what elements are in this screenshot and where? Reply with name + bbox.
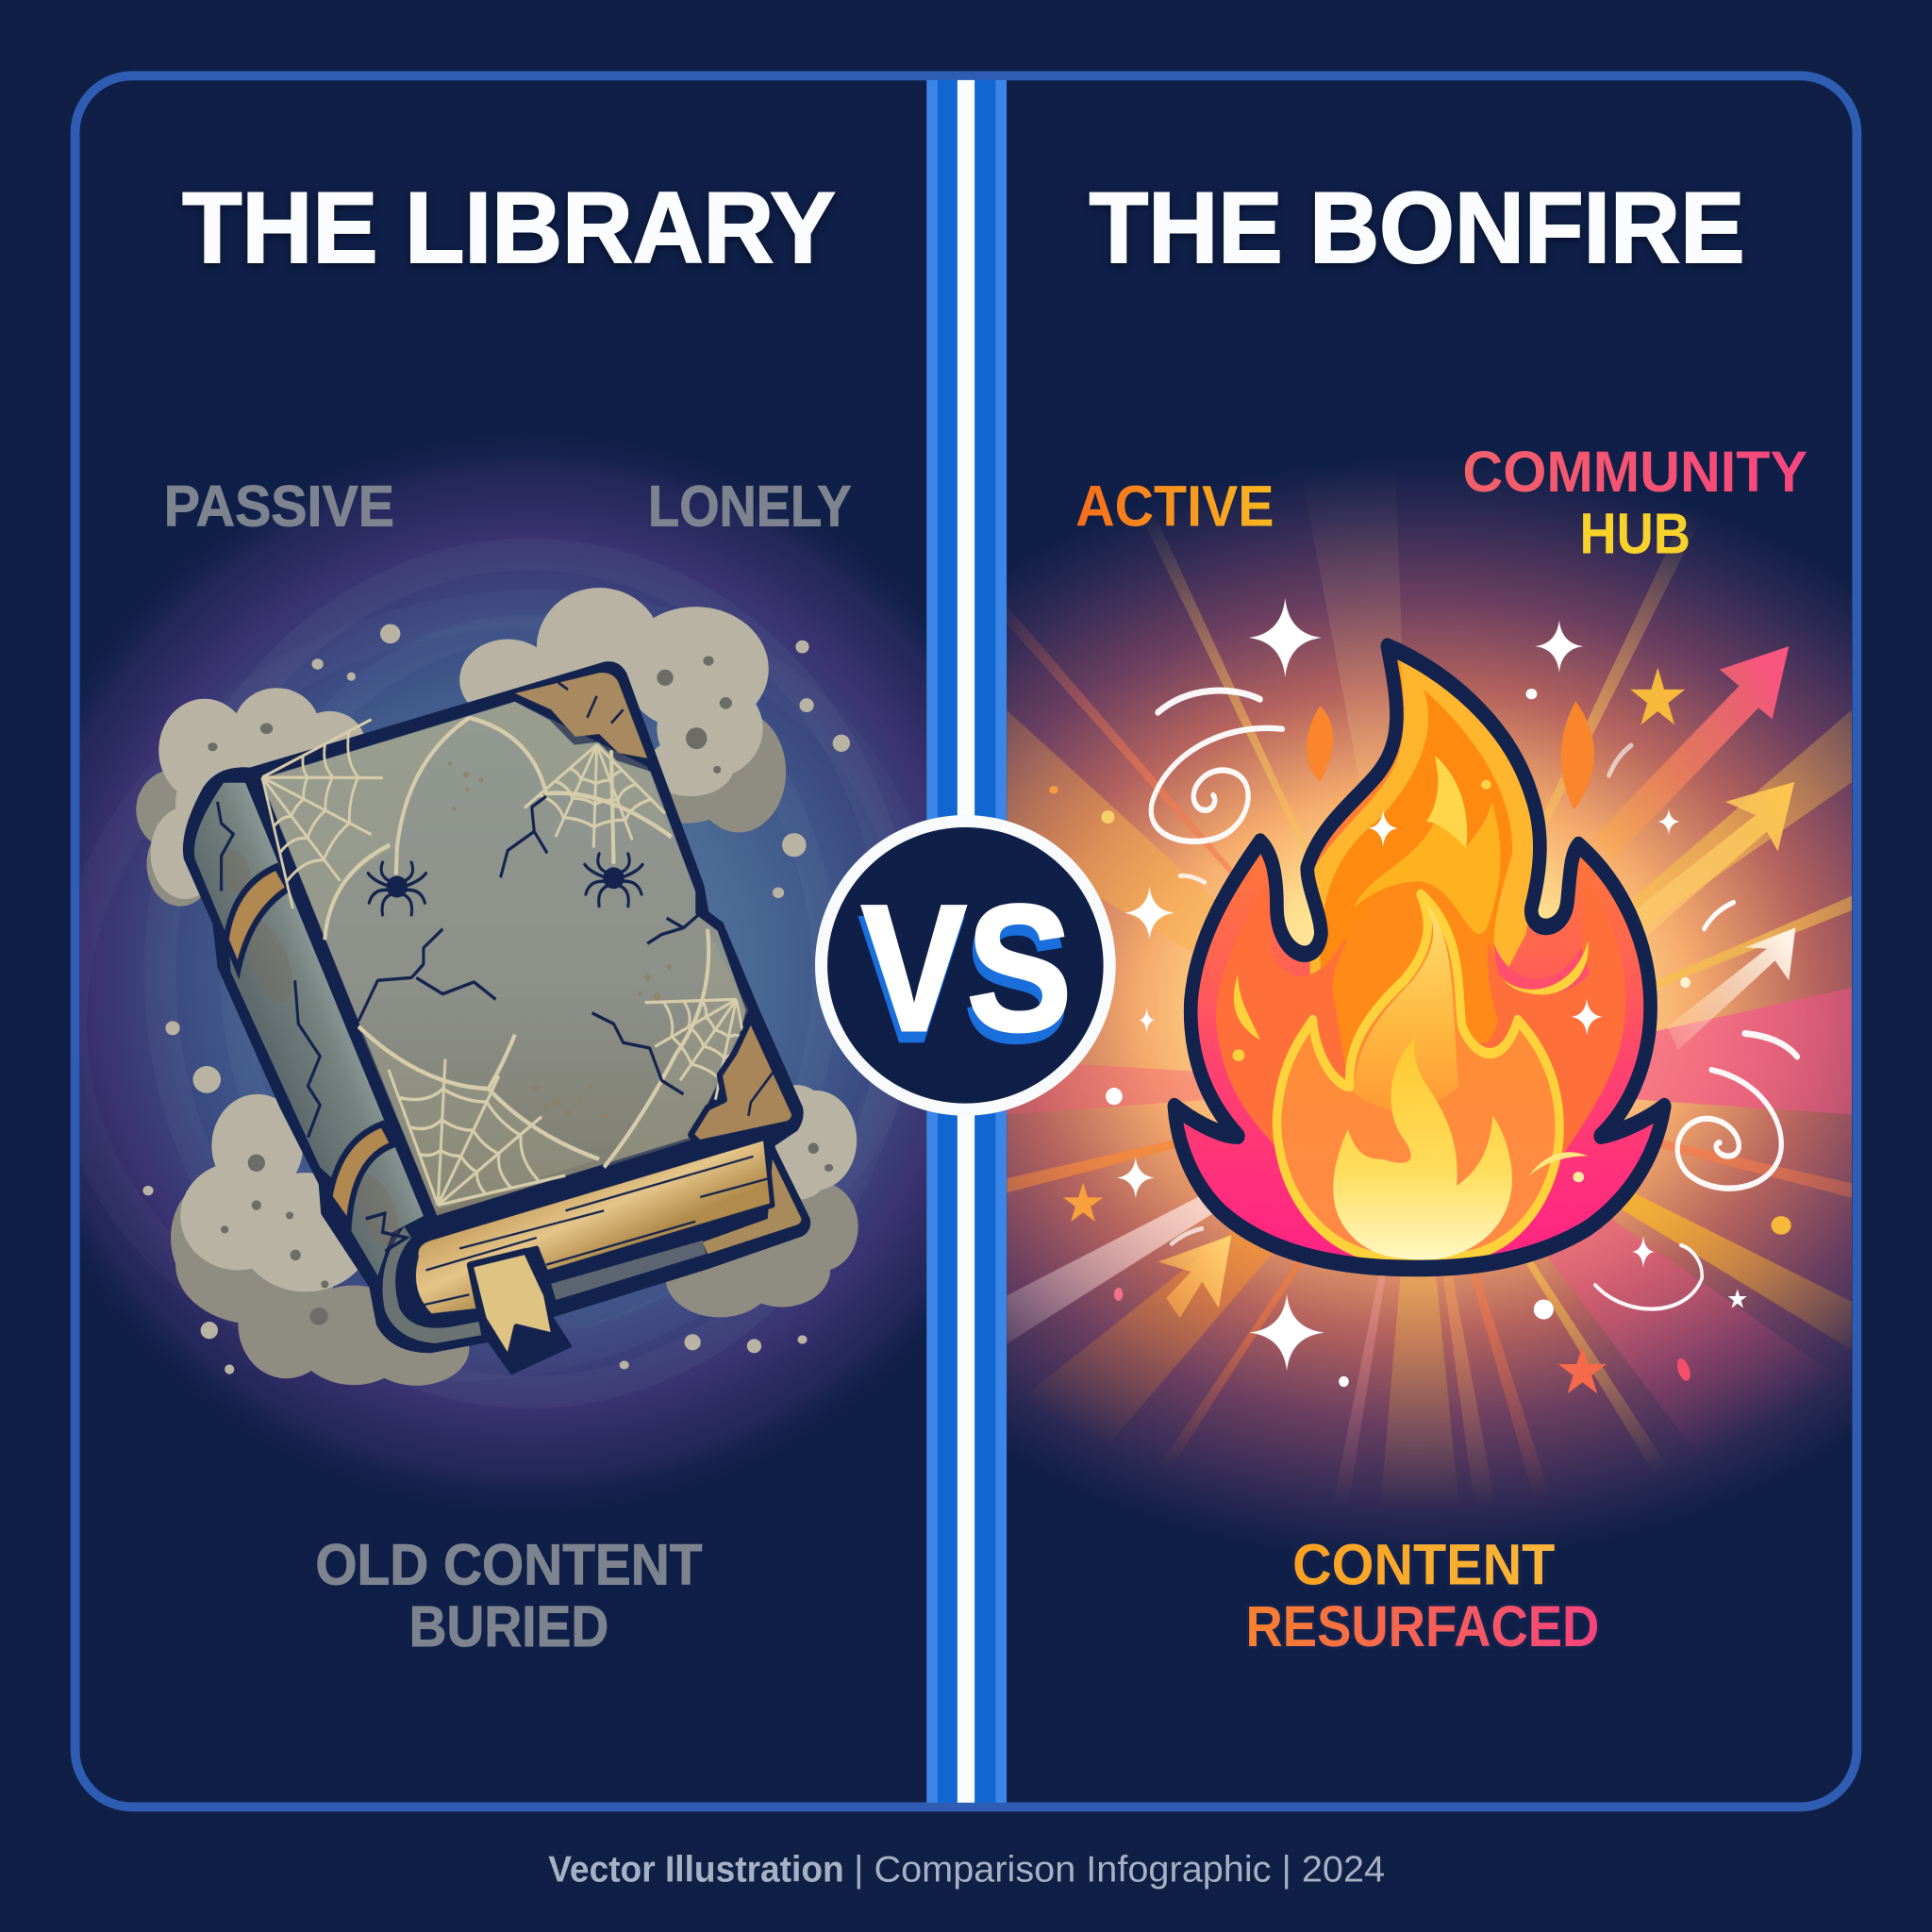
label: community hub bbox=[1462, 440, 1807, 566]
swirls bbox=[1151, 691, 1797, 1309]
footer bbox=[548, 1849, 1385, 1890]
center divider bbox=[926, 80, 1007, 1803]
flame body bbox=[1174, 646, 1664, 1269]
flame bbox=[1174, 646, 1664, 1269]
vs badge bbox=[822, 822, 1109, 1109]
vs text: VS bbox=[861, 868, 1072, 1069]
light rays bbox=[1007, 511, 1853, 1489]
dust clouds bbox=[136, 588, 858, 1386]
label: passive: PASSIVE bbox=[164, 475, 394, 540]
footer: | Comparison Infographic | 2024 bbox=[854, 1849, 1385, 1890]
label: old content buried: BURIED bbox=[409, 1594, 608, 1659]
label: lonely: LONELY bbox=[648, 475, 852, 540]
torn corner: bottom right bbox=[691, 1018, 794, 1143]
radial glow bbox=[998, 74, 1860, 1811]
page lines bbox=[421, 1157, 770, 1306]
arrow: lower left bbox=[1158, 1235, 1231, 1318]
label: community hub: COMMUNITY bbox=[1462, 440, 1807, 505]
sparkles bbox=[1117, 598, 1680, 1371]
dots bbox=[1049, 689, 1791, 1387]
flame: mid tongue gold bbox=[1355, 903, 1458, 1111]
label: old content buried bbox=[315, 1533, 702, 1659]
cover cracks bbox=[358, 796, 698, 1094]
panel: the bonfire bbox=[1007, 472, 1853, 1547]
label: content resurfaced: CONTENT bbox=[1292, 1533, 1555, 1598]
illustration: dusty book bbox=[136, 588, 858, 1386]
flame: core bbox=[1333, 1037, 1512, 1259]
footer: Vector Illustration bbox=[548, 1849, 844, 1890]
web shading bbox=[262, 702, 748, 1210]
back cover curl bbox=[383, 1227, 481, 1343]
small flames bbox=[1307, 701, 1594, 809]
back cover tan edge bbox=[703, 1159, 801, 1254]
front cover bbox=[258, 699, 748, 1219]
bonfire illustration bbox=[1049, 598, 1797, 1393]
arrow: yellow bbox=[1634, 782, 1794, 938]
vs shadow: VS bbox=[858, 879, 1070, 1080]
bookmark ribbon bbox=[470, 1251, 555, 1359]
label: active: ACTIVE bbox=[1075, 475, 1274, 540]
cover stains bbox=[448, 761, 672, 1119]
title: the bonfire: THE BONFIRE bbox=[1090, 171, 1744, 284]
label: content resurfaced bbox=[1245, 1533, 1599, 1659]
badge circle bbox=[822, 822, 1109, 1109]
spine rust bbox=[214, 843, 408, 1253]
label: community hub: HUB bbox=[1579, 501, 1690, 566]
cobwebs bbox=[223, 683, 791, 1258]
flame: mid tongue bbox=[1276, 894, 1559, 1257]
title: the library: THE LIBRARY bbox=[182, 171, 836, 284]
corner cracks bbox=[558, 682, 774, 1116]
flame accents bbox=[1233, 780, 1603, 1182]
spine bbox=[194, 783, 424, 1275]
panel: the library bbox=[80, 451, 926, 1496]
arrow: white bbox=[1667, 927, 1795, 1050]
back cover strip bbox=[551, 1241, 706, 1300]
flame outline bbox=[1174, 646, 1664, 1269]
glow disc bbox=[1007, 473, 1852, 1548]
torn corner: top right bbox=[515, 673, 647, 758]
flame inner layers bbox=[1216, 650, 1625, 1159]
spine bands bbox=[226, 867, 393, 1224]
page block bbox=[413, 1138, 773, 1316]
arrow: pink bbox=[1595, 646, 1789, 861]
label: content resurfaced: RESURFACED bbox=[1245, 1594, 1599, 1659]
label: old content buried: OLD CONTENT bbox=[315, 1533, 702, 1598]
stars bbox=[1063, 668, 1747, 1393]
spiders bbox=[368, 854, 642, 915]
dust swirl backdrop bbox=[80, 454, 926, 1492]
spine cracks bbox=[217, 802, 407, 1251]
book silhouette bbox=[184, 663, 809, 1374]
